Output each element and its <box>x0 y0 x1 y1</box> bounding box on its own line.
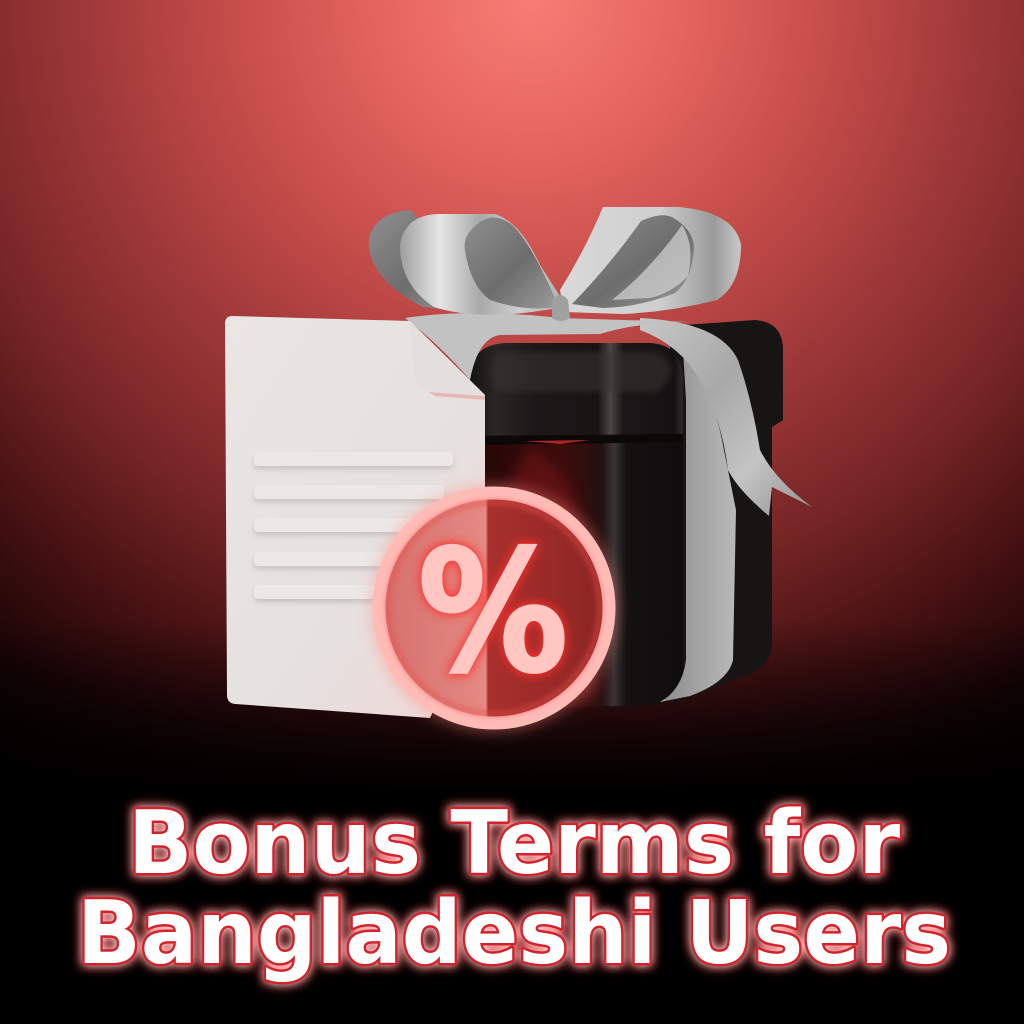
title line 1: Bonus Terms for <box>128 792 900 894</box>
box front <box>470 343 683 708</box>
bow right inner <box>572 215 694 308</box>
paper sheet <box>225 316 485 718</box>
bow right loop <box>560 207 741 314</box>
bow left loop <box>400 214 560 315</box>
text lines <box>254 452 453 602</box>
top left ribbon <box>405 313 690 380</box>
title line 1: Bonus Terms for <box>128 792 900 894</box>
bow left inner <box>465 217 557 308</box>
percent sign: % <box>418 514 568 710</box>
bow back left loop <box>369 210 470 312</box>
title <box>77 792 951 984</box>
document <box>225 316 485 718</box>
percent sign: % <box>418 514 568 710</box>
paper fold <box>410 321 485 395</box>
ribbon tail <box>640 318 812 516</box>
vertical ribbon <box>660 350 736 702</box>
title line 2: Bangladeshi Users <box>77 882 951 984</box>
bow knot <box>552 295 570 321</box>
gift box <box>369 207 812 708</box>
title line 2: Bangladeshi Users <box>77 882 951 984</box>
box right side <box>670 320 783 704</box>
percent badge <box>370 484 618 732</box>
